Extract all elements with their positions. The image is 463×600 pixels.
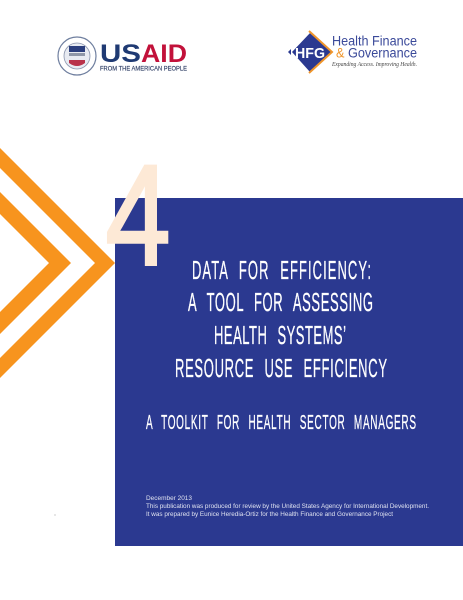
HFG name: Health Finance <box>332 34 417 48</box>
Health Finance and Governance logo: & Governance <box>336 46 417 60</box>
USAID logo <box>58 37 188 75</box>
icon: HFG diamond: HFG <box>295 45 325 62</box>
icon: orange chevrons <box>0 148 115 378</box>
publication note <box>146 495 429 518</box>
USAID wordmark: US <box>100 40 141 68</box>
title: DATA FOR EFFICIENCY: <box>192 256 371 285</box>
title: HEALTH SYSTEMS’ <box>214 321 346 350</box>
subtitle: A TOOLKIT FOR HEALTH SECTOR MANAGERS <box>146 413 416 434</box>
title: A TOOL FOR ASSESSING <box>188 288 373 317</box>
USAID logo: AID <box>141 40 187 68</box>
HFG tagline: Expanding Access. Improving Health. <box>331 61 417 68</box>
USAID tagline: FROM THE AMERICAN PEOPLE <box>100 66 188 72</box>
publication note: December 2013 <box>146 495 193 502</box>
panel: blue title block <box>115 198 463 546</box>
publication note: This publication was produced for review by the United States Agency for International Development. <box>146 503 429 510</box>
publication note: It was prepared by Eunice Heredia-Ortiz for the Health Finance and Governance Project <box>146 511 393 518</box>
title <box>175 256 387 383</box>
title: RESOURCE USE EFFICIENCY <box>175 354 387 383</box>
icon: USAID seal <box>58 37 96 75</box>
stray dot <box>54 514 56 516</box>
big number 4: 4 <box>106 136 170 296</box>
Health Finance and Governance logo <box>288 31 417 73</box>
